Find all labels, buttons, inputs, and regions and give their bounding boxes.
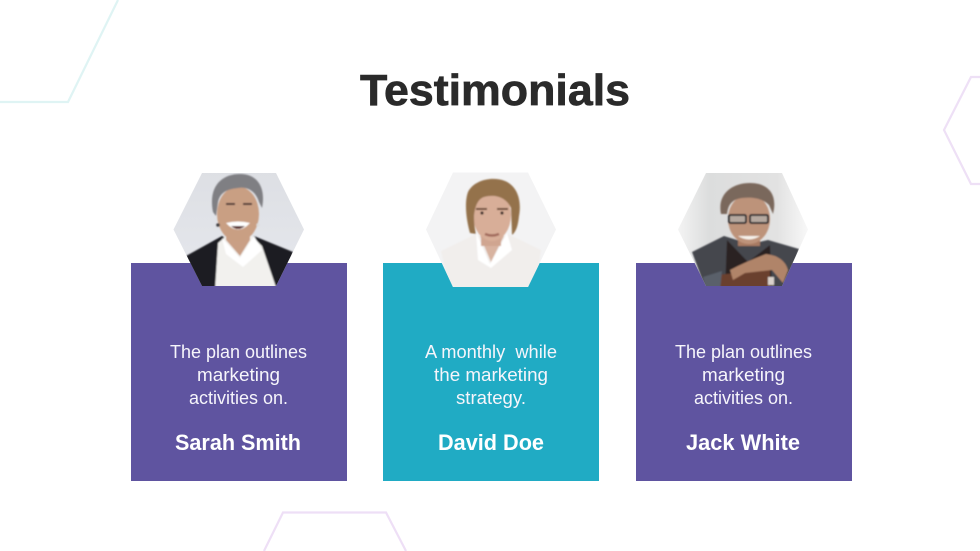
panel: David Doe testimonial: [383, 170, 599, 481]
portrait: Sarah Smith: [174, 173, 304, 286]
testimonial text: David Doe: strategy.: [456, 388, 526, 408]
panel: Jack White testimonial: [636, 170, 852, 481]
card background: Sarah Smith: [131, 263, 347, 481]
testimonial text: Jack White: activities on.: [694, 388, 793, 408]
testimonial text: Sarah Smith: [170, 342, 307, 408]
testimonial text: Sarah Smith: marketing: [197, 365, 280, 385]
card background: David Doe: [383, 263, 599, 481]
testimonial text: David Doe: [425, 342, 557, 408]
testimonial text: Jack White: The plan outlines: [675, 342, 812, 362]
testimonial text: David Doe: the marketing: [434, 365, 548, 385]
name: David Doe: David Doe: [438, 430, 544, 455]
testimonial text: Jack White: marketing: [702, 365, 785, 385]
testimonial text: David Doe: A monthly while: [425, 342, 557, 362]
decorative hexagon: right edge: [944, 77, 980, 184]
title: Testimonials: [360, 66, 630, 115]
decorative hexagon: top left: [0, 0, 118, 102]
panel: Sarah Smith testimonial: [131, 170, 347, 481]
testimonial text: Sarah Smith: activities on.: [189, 388, 288, 408]
name: Jack White: Jack White: [686, 430, 800, 455]
decorative hexagon: bottom: [264, 512, 406, 551]
testimonial text: Sarah Smith: The plan outlines: [170, 342, 307, 362]
card background: Jack White: [636, 263, 852, 481]
portrait: David Doe: [426, 172, 556, 287]
portrait: Jack White: [678, 173, 806, 286]
testimonial text: Jack White: [675, 342, 812, 408]
name: Sarah Smith: Sarah Smith: [175, 430, 301, 455]
